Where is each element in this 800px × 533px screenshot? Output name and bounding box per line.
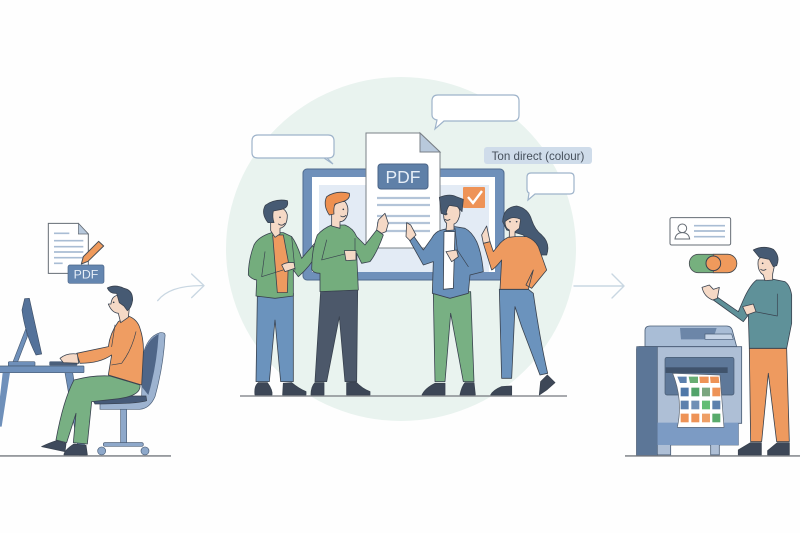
scene: author at desk <box>0 223 204 456</box>
person: green jacket <box>248 200 327 395</box>
person: woman in orange <box>482 206 555 395</box>
background circle <box>226 77 576 421</box>
right team pair <box>406 195 555 395</box>
operator <box>702 247 792 455</box>
arrow <box>158 274 204 301</box>
PDF document: PDF <box>386 167 420 187</box>
person: blue jacket <box>406 195 483 395</box>
arrow: to printing <box>574 274 624 298</box>
person: green sweater pointing <box>311 192 388 395</box>
icon: document with pencil and PDF badge: PDF <box>74 268 99 282</box>
ground line right <box>625 454 800 458</box>
speech bubble left <box>252 135 334 164</box>
label: Ton direct (colour): Ton direct (colour) <box>492 150 585 163</box>
man working at computer <box>42 286 143 455</box>
speech bubble small <box>527 173 574 200</box>
ground line centre <box>240 395 567 397</box>
label: Ton direct (colour) <box>484 147 592 164</box>
speech bubble top <box>432 95 519 129</box>
desk and monitor <box>0 298 86 455</box>
chair <box>93 333 165 455</box>
toggle switch <box>689 254 737 273</box>
monitor <box>303 169 504 280</box>
icon: document with pencil and PDF badge <box>48 223 104 283</box>
PDF document <box>366 133 440 248</box>
left team pair <box>248 192 388 395</box>
icon: orange check box <box>463 187 485 208</box>
scene: printer and operator <box>625 218 800 456</box>
colour swatches <box>677 377 720 422</box>
id card icon <box>670 218 731 245</box>
printer <box>637 326 742 456</box>
ground line <box>0 454 171 458</box>
